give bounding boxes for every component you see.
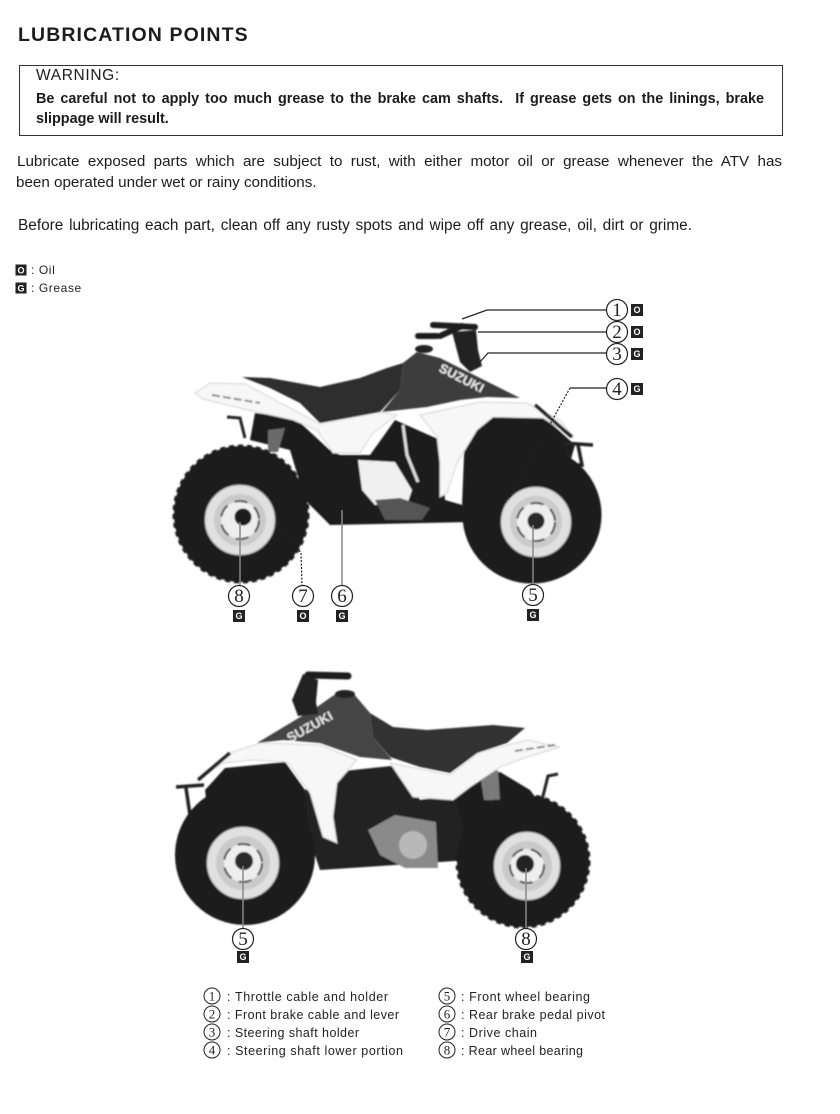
callout 5: G xyxy=(529,610,537,620)
callout 4: 4 xyxy=(612,379,622,400)
engine xyxy=(358,460,412,505)
dark front suspension xyxy=(462,415,575,505)
key item 7: : Drive chain xyxy=(461,1026,537,1040)
warning box xyxy=(19,65,783,136)
warning line 2: slippage will result. xyxy=(36,111,169,127)
legend: oil and grease: : Oil xyxy=(31,263,55,277)
legend: oil and grease xyxy=(16,263,82,295)
front rack xyxy=(176,753,230,815)
dark underbody xyxy=(305,420,480,525)
key item 3: : Steering shaft holder xyxy=(227,1026,359,1040)
dark rear fender underside xyxy=(445,772,545,860)
callout 1 xyxy=(606,300,643,321)
callout 5: G xyxy=(239,952,247,962)
callout 7 xyxy=(292,586,314,622)
callout 7: O xyxy=(299,611,307,621)
key item 4: 4 xyxy=(209,1042,216,1058)
key item 2: 2 xyxy=(209,1006,215,1022)
key item 8: : Rear wheel bearing xyxy=(461,1044,583,1058)
seat xyxy=(242,363,403,423)
callout 3: G xyxy=(633,349,641,359)
legend: oil and grease: : Grease xyxy=(31,281,82,295)
legend: oil and grease: G xyxy=(17,284,25,294)
warning line 1: Be careful not to apply too much grease to the brake cam shafts. If grease gets on the linings, brake xyxy=(36,91,764,107)
handlebar xyxy=(308,675,348,676)
SUZUKI tank logo: SUZUKI xyxy=(284,708,335,746)
key item 4: : Steering shaft lower portion xyxy=(227,1044,403,1058)
intro paragraph line 1: Lubricate exposed parts which are subject to rust, with either motor oil or grease whenever the ATV has xyxy=(17,153,782,170)
rear rack bar xyxy=(227,417,245,438)
key item 6: 6 xyxy=(444,1006,451,1022)
frame tube xyxy=(403,425,418,482)
intro paragraph line 2: been operated under wet or rainy conditions. xyxy=(16,174,317,191)
callout 8 xyxy=(516,928,536,963)
rear fender and side panel xyxy=(195,383,397,453)
callouts: upper ATV xyxy=(228,300,643,622)
front wheel xyxy=(464,448,600,582)
callout 8: G xyxy=(523,952,531,962)
callout 5: 5 xyxy=(528,585,538,606)
callouts: lower ATV xyxy=(232,866,536,963)
callout 2: O xyxy=(633,327,641,337)
title: LUBRICATION POINTS xyxy=(18,24,249,46)
rear wheel xyxy=(457,795,589,927)
key item 5: 5 xyxy=(444,988,450,1004)
side panel and rear fender xyxy=(390,740,560,800)
callout 6: G xyxy=(338,611,346,621)
rear rack bar xyxy=(542,774,558,800)
key item 8: 8 xyxy=(444,1042,450,1058)
callout 8: 8 xyxy=(234,586,244,607)
key item 7 xyxy=(439,1024,537,1040)
key item 5: : Front wheel bearing xyxy=(461,990,590,1004)
callout 5 xyxy=(232,928,254,963)
callout 3: 3 xyxy=(612,344,622,365)
callout 2 xyxy=(606,322,643,343)
front rack xyxy=(535,405,593,465)
key: parts list xyxy=(204,988,606,1058)
key item 6: : Rear brake pedal pivot xyxy=(461,1008,606,1022)
callout 8 xyxy=(228,586,250,622)
handlebar xyxy=(418,325,475,336)
legend: oil and grease: O xyxy=(17,266,25,276)
callout 6: 6 xyxy=(337,586,347,607)
warning heading: WARNING: xyxy=(36,67,120,84)
dark rear fender underside xyxy=(250,413,340,505)
callout 2: 2 xyxy=(612,322,622,343)
callout 4: G xyxy=(633,384,641,394)
key item 1: : Throttle cable and holder xyxy=(227,990,388,1004)
photo: ATV left side xyxy=(175,674,589,927)
SUZUKI tank logo: SUZUKI xyxy=(437,360,487,396)
fuel tank xyxy=(382,352,520,412)
dark underbody xyxy=(305,765,470,870)
callout 8: 8 xyxy=(521,929,531,950)
callout 6 xyxy=(332,586,352,622)
callout 4 xyxy=(606,378,643,400)
tank cap xyxy=(415,345,433,353)
fuel tank xyxy=(257,693,392,760)
callout 7: 7 xyxy=(298,586,308,607)
key item 7: 7 xyxy=(444,1024,451,1040)
photo: ATV right side xyxy=(174,325,600,582)
callout 5 xyxy=(522,584,544,621)
callout 1: O xyxy=(633,305,641,315)
key item 1: 1 xyxy=(209,988,215,1004)
front fender xyxy=(420,402,574,497)
callout 3 xyxy=(606,344,643,365)
key item 2: : Front brake cable and lever xyxy=(227,1008,399,1022)
engine xyxy=(368,815,438,868)
tank cap xyxy=(335,690,355,698)
key item 3: 3 xyxy=(209,1024,215,1040)
front fender xyxy=(197,743,357,843)
rear wheel xyxy=(174,446,308,582)
rear shock spring xyxy=(480,770,500,800)
front wheel xyxy=(175,785,315,925)
dark front suspension xyxy=(205,762,310,830)
rear shock xyxy=(268,428,285,452)
callout 8: G xyxy=(235,611,243,621)
callout 5: 5 xyxy=(238,929,248,950)
cleaning instruction: Before lubricating each part, clean off any rusty spots and wipe off any grease, oil, dirt or grime. xyxy=(18,217,692,234)
callout 1: 1 xyxy=(612,300,622,321)
seat xyxy=(370,713,525,773)
